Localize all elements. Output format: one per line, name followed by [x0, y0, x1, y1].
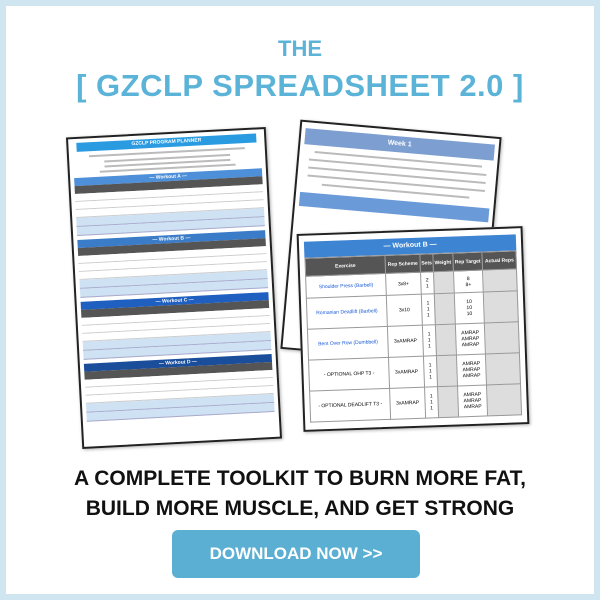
- sheet: workout B: 1: [428, 337, 431, 343]
- sheet: workout B: 1: [430, 405, 433, 411]
- sheet: workout B: 1: [426, 300, 429, 307]
- sheet: workout B: AMRAP: [462, 342, 480, 348]
- sheet: workout B: — Workout B —: [383, 241, 437, 250]
- sheet: program planner: — Workout C —: [156, 297, 194, 305]
- sheet: workout B: 3x8+: [398, 281, 409, 287]
- sheet: workout B: Exercise: [335, 262, 356, 269]
- sheet: program planner: — Workout B —: [152, 235, 191, 243]
- title: THE: THE: [278, 36, 322, 61]
- sheet: workout B: Romanian Deadlift (Barbell): [316, 308, 378, 316]
- sheet: workout B: 8: [467, 275, 470, 282]
- sheet: workout B: Rep Scheme: [388, 260, 418, 267]
- sheet: workout B: 10: [466, 305, 472, 311]
- sheet: workout B: - OPTIONAL DEADLIFT T3 -: [318, 401, 382, 409]
- sheet: program planner: — Workout D —: [159, 359, 197, 367]
- sheet: workout B: 1: [429, 374, 432, 380]
- sheet: workout B: [297, 226, 529, 432]
- sheet: workout B: - OPTIONAL OHP T3 -: [324, 370, 374, 378]
- sheet: workout B: AMRAP: [463, 373, 481, 379]
- sheet: workout B: Bent Over Row (Dumbbell): [318, 339, 378, 347]
- title: GZCLP SPREADSHEET 2.0: [ GZCLP SPREADSHEET 2.0 ]: [76, 68, 524, 103]
- sheet: workout B: 1: [428, 331, 431, 337]
- headline line 2: BUILD MORE MUSCLE, AND GET STRONG: [86, 497, 514, 520]
- button: download now: DOWNLOAD NOW >>: [210, 544, 382, 563]
- sheet: workout B: 3xAMRAP: [395, 369, 418, 376]
- sheet: week 1: Week 1: [387, 139, 412, 148]
- sheet: workout B: 1: [429, 368, 432, 374]
- sheet: workout B: 1: [426, 283, 429, 289]
- sheet: workout B: AMRAP: [461, 336, 479, 342]
- sheet: program planner: — Workout A —: [149, 173, 187, 181]
- sheet: workout B: 1: [430, 399, 433, 405]
- sheet: workout B: Sets: [421, 260, 432, 266]
- sheet: workout B: AMRAP: [463, 392, 481, 398]
- sheet: workout B: 3xAMRAP: [394, 338, 417, 345]
- sheet: workout B: 3x10: [399, 307, 410, 313]
- sheet: workout B: 10: [466, 299, 472, 305]
- button: download now: [172, 530, 420, 578]
- sheet: workout B: Shoulder Press (Barbell): [319, 282, 373, 290]
- sheet: workout B: AMRAP: [464, 404, 482, 410]
- sheet: week 1: [280, 120, 502, 366]
- sheet: workout B: Actual Reps: [485, 257, 514, 264]
- sheet: workout B: 1: [427, 312, 430, 319]
- sheet: workout B: 3xAMRAP: [396, 400, 419, 407]
- sheet: workout B: 8+: [466, 281, 471, 288]
- sheet: workout B: AMRAP: [462, 367, 480, 373]
- sheet: workout B: Weight: [434, 259, 451, 266]
- sheet: workout B: 10: [467, 311, 472, 317]
- sheet: workout B: 1: [427, 306, 430, 313]
- sheet: workout B: Rep Target: [455, 258, 481, 265]
- sheet: workout B: AMRAP: [464, 398, 482, 404]
- sheet: program planner: [66, 127, 282, 449]
- sheet: workout B: 1: [429, 362, 432, 368]
- sheet: workout B: 1: [428, 343, 431, 349]
- headline: A COMPLETE TOOLKIT TO BURN MORE FAT,: [74, 467, 526, 490]
- sheet: program planner: GZCLP PROGRAM PLANNER: [131, 137, 201, 147]
- sheet: workout B: AMRAP: [461, 330, 479, 336]
- sheet: workout B: AMRAP: [462, 361, 480, 367]
- sheet: workout B: 2: [426, 277, 429, 283]
- sheet: workout B: 1: [430, 393, 433, 399]
